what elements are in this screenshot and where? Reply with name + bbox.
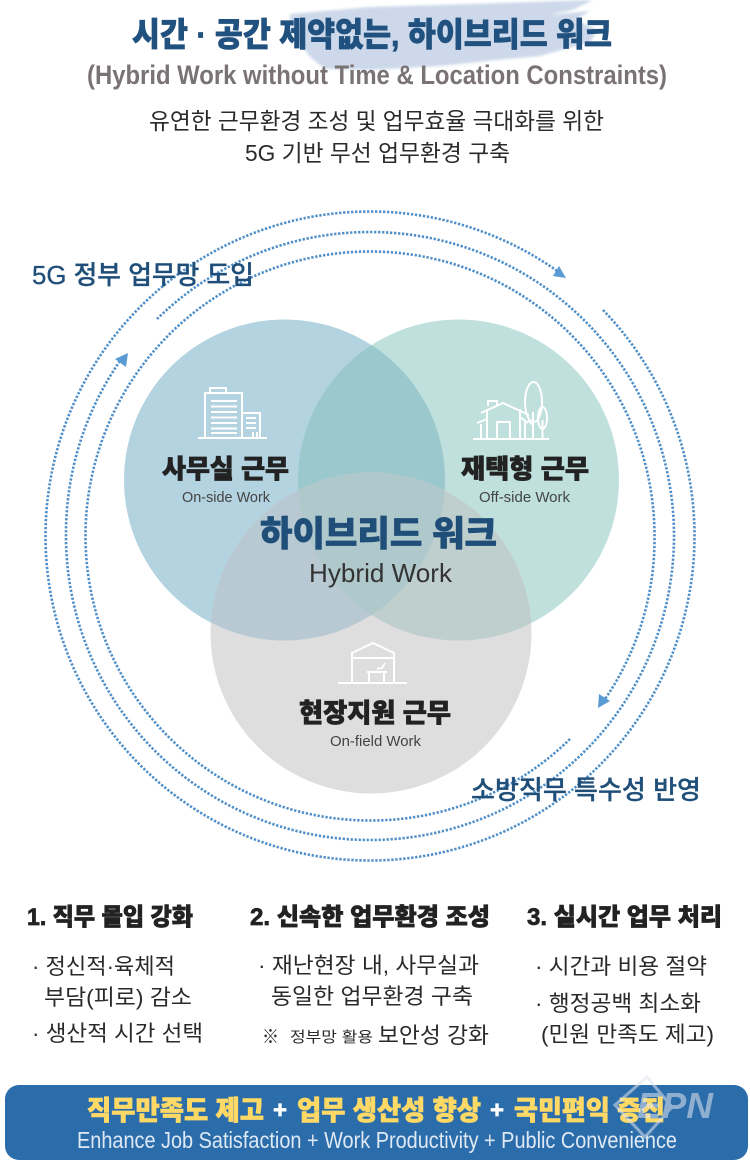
hybrid work label: 하이브리드 워크: [260, 515, 497, 554]
banner headline: +: [273, 1097, 287, 1124]
icon: house with trees: [473, 382, 549, 439]
circle: home: [298, 320, 619, 640]
remote work label: [461, 454, 589, 506]
circle: office: [124, 320, 445, 640]
watermark: [615, 1077, 714, 1137]
column text: 부담(피로) 감소: [44, 985, 192, 1010]
column text: · 시간과 비용 절약: [535, 954, 707, 979]
venn diagram: [124, 320, 619, 794]
remote work label: 재택형 근무: [461, 454, 589, 484]
overlap: all three: [298, 472, 444, 614]
hybrid work label: [260, 515, 497, 588]
column text: · 행정공백 최소화: [535, 991, 701, 1016]
subtitle: (Hybrid Work without Time & Location Constraints): [87, 60, 667, 90]
office work label: [162, 454, 289, 506]
icon: field office: [338, 643, 407, 683]
bottom banner: [5, 1085, 748, 1160]
column text: [32, 954, 203, 1046]
column text: 보안성 강화: [378, 1023, 489, 1048]
dotted ring arrows: [46, 212, 695, 860]
description: 5G 기반 무선 업무환경 구축: [245, 140, 510, 166]
field work label: On-field Work: [330, 734, 422, 750]
field work label: [299, 698, 451, 750]
column text: [535, 954, 714, 1047]
brush stroke behind title: [290, 0, 598, 70]
banner headline: +: [490, 1097, 504, 1124]
column text: [258, 953, 489, 1048]
remote work label: Off-side Work: [479, 490, 571, 506]
column text: (민원 만족도 제고): [541, 1022, 714, 1047]
arrow ring: inner: [86, 252, 655, 821]
column 1: job immersion: [27, 904, 203, 1046]
office work label: 사무실 근무: [162, 454, 289, 484]
column text: · 생산적 시간 선택: [32, 1021, 203, 1046]
column text: · 정신적·육체적: [32, 954, 175, 979]
column heading: 1. 직무 몰입 강화: [27, 904, 193, 931]
banner background: [5, 1085, 748, 1160]
icon: office building: [198, 388, 267, 438]
column 2: fast work environment: [250, 904, 490, 1048]
column text: · 재난현장 내, 사무실과: [258, 953, 479, 978]
column text: 동일한 업무환경 구축: [271, 984, 473, 1009]
column text: ※: [262, 1027, 279, 1048]
circle: field: [210, 472, 532, 794]
column heading: 3. 실시간 업무 처리: [527, 904, 722, 931]
banner headline: 직무만족도 제고: [87, 1096, 264, 1126]
arrow ring: middle: [66, 232, 674, 840]
label: 5G government network: 5G 정부 업무망 도입: [32, 260, 254, 290]
column text: 정부망 활용: [290, 1029, 373, 1046]
description: 유연한 근무환경 조성 및 업무효율 극대화를 위한: [149, 108, 604, 134]
field work label: 현장지원 근무: [299, 698, 451, 728]
watermark: EPN: [637, 1085, 714, 1126]
banner subtitle: Enhance Job Satisfaction + Work Productivity + Public Convenience: [77, 1127, 677, 1153]
banner headline: 업무 생산성 향상: [297, 1096, 481, 1126]
title: 시간 · 공간 제약없는, 하이브리드 워크: [132, 16, 612, 53]
banner headline: 국민편익 증진: [514, 1096, 665, 1126]
description: [149, 108, 604, 166]
office work label: On-side Work: [182, 490, 271, 506]
overlap: field and office: [211, 490, 372, 640]
overlap: office and home: [298, 345, 445, 490]
hybrid work label: Hybrid Work: [309, 558, 453, 588]
arrow ring: outer: [46, 212, 695, 860]
label: firefighting duty: 소방직무 특수성 반영: [471, 775, 701, 805]
column 3: real-time processing: [527, 904, 722, 1047]
overlap: field and home: [372, 490, 531, 640]
banner headline: [87, 1096, 665, 1126]
column heading: 2. 신속한 업무환경 조성: [250, 904, 490, 931]
